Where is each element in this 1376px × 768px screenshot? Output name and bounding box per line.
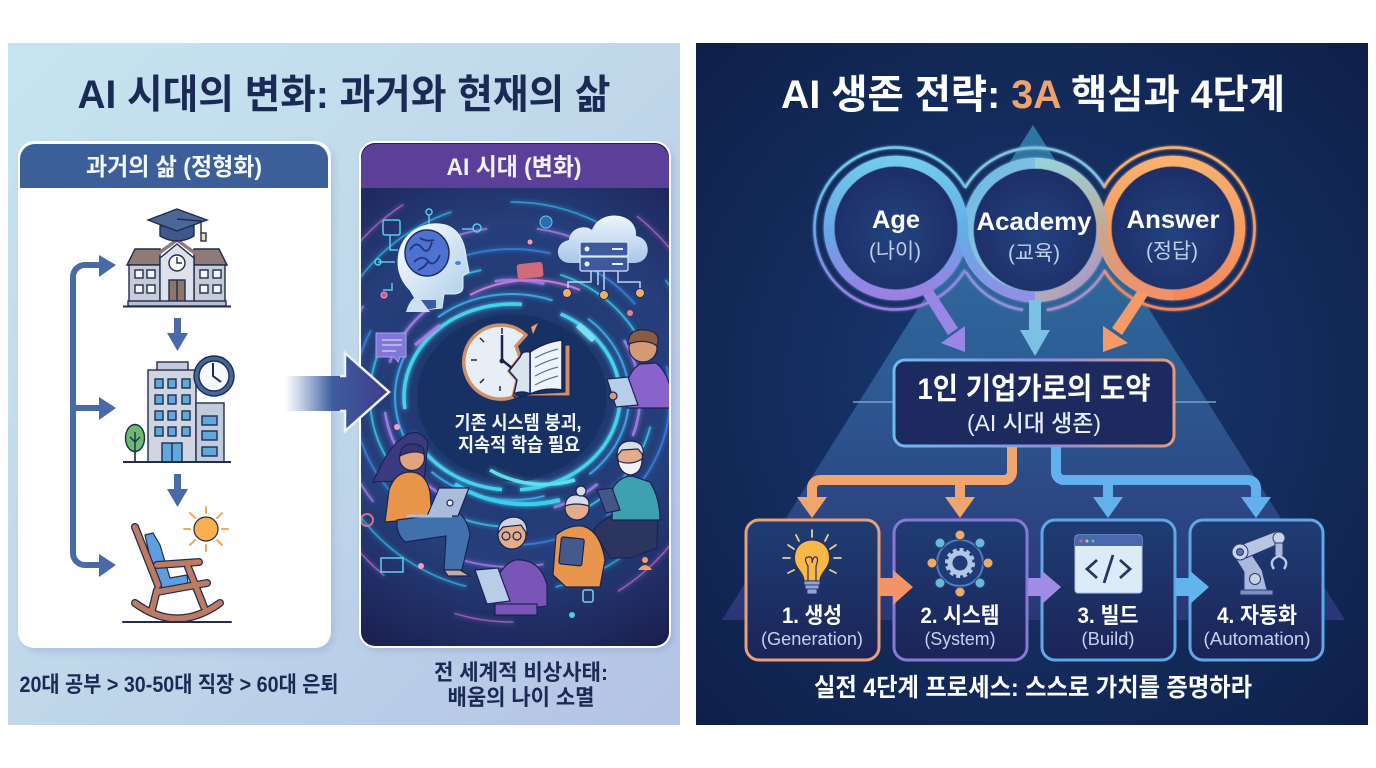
center box: 1인 기업가로의 도약 <box>918 373 1150 406</box>
ring: Answer <box>1106 161 1240 295</box>
person: man with glasses and tablet <box>475 517 547 615</box>
arrow: step 2 to 3 <box>1028 570 1061 605</box>
step 3: build <box>1042 520 1175 660</box>
arrow: step 1 to 2 <box>880 570 913 605</box>
center box: (AI 시대 생존) <box>967 410 1101 436</box>
step 4: automation: 4. 자동화 <box>1217 603 1297 628</box>
icon: cloud server <box>558 216 648 300</box>
ring: Age: Age <box>872 206 920 234</box>
icon: broken clock and book <box>464 323 570 399</box>
icon: gear network <box>927 530 993 597</box>
icon: light bulb <box>783 530 841 594</box>
icon: small floating tags <box>361 216 652 602</box>
S-curve weave <box>896 161 1173 297</box>
arrow: step 3 to 4 <box>1176 570 1209 605</box>
panel: past life <box>18 141 334 652</box>
AI era header: AI 시대 (변화) <box>446 154 582 181</box>
left title: AI 시대의 변화: 과거와 현재의 삶 <box>78 73 610 117</box>
past life header: 과거의 삶 (정형화) <box>86 154 262 181</box>
step 4: automation <box>1190 520 1323 660</box>
pyramid background <box>722 125 1345 620</box>
ring: Academy <box>968 163 1102 297</box>
step 4: automation: (Automation) <box>1204 629 1310 649</box>
arrow: office to retirement <box>167 474 188 507</box>
icon: AI head with brain <box>375 209 481 312</box>
AI illustration background <box>361 143 669 646</box>
step 2: system: (System) <box>924 629 996 649</box>
right caption: global emergency <box>434 660 608 710</box>
icon: school <box>123 209 231 306</box>
ring: Academy: Academy <box>976 208 1092 236</box>
step 1: generation <box>746 520 879 660</box>
step 2: system: 2. 시스템 <box>920 603 1000 628</box>
person: older woman with tablet <box>553 486 605 587</box>
right caption: global emergency: 배움의 나이 소멸 <box>448 685 594 710</box>
person: woman with laptop <box>373 432 470 576</box>
arrow: past to AI era <box>285 352 390 432</box>
right caption: global emergency: 전 세계적 비상사태: <box>434 660 608 685</box>
connector: orange branch <box>797 447 1012 518</box>
ring: Answer: (정답) <box>1146 240 1198 263</box>
left caption: life stages: 20대 공부 > 30-50대 직장 > 60대 은퇴 <box>20 672 338 697</box>
step 2: system <box>894 520 1027 660</box>
connector: blue branch <box>1056 447 1271 518</box>
arrow: Answer to center <box>1103 290 1148 352</box>
person: older man with tablet <box>593 441 660 558</box>
step 3: build: (Build) <box>1082 629 1134 649</box>
icon: code window <box>1075 535 1142 593</box>
arrow: Age to center <box>923 290 965 352</box>
ring: Age <box>829 161 963 295</box>
center message <box>454 412 582 456</box>
icon: robot arm <box>1232 531 1286 595</box>
panel: right background <box>696 43 1368 725</box>
icon: office building <box>123 356 234 462</box>
icon: sun <box>184 507 228 551</box>
center message: 지속적 학습 필요 <box>458 434 580 456</box>
step 1: generation: 1. 생성 <box>782 603 842 628</box>
arrow: school to office <box>167 318 188 351</box>
ring: Age: (나이) <box>869 240 921 263</box>
center message: 기존 시스템 붕괴, <box>454 412 582 434</box>
bottom caption: 실전 4단계 프로세스: 스스로 가치를 증명하라 <box>814 674 1252 702</box>
step 1: generation: (Generation) <box>761 629 863 649</box>
3A interlocking rings <box>814 147 1255 310</box>
loop bracket arrow <box>73 255 116 577</box>
person: woman with tablet <box>607 330 672 408</box>
step 3: build: 3. 빌드 <box>1078 603 1138 628</box>
ring: Answer: Answer <box>1126 206 1220 234</box>
outer thin rings <box>814 147 1255 310</box>
swirling rings <box>361 198 669 626</box>
arrow: Academy to center <box>1020 300 1050 356</box>
center box <box>894 360 1174 446</box>
AI era header <box>361 144 669 188</box>
ring: Academy: (교육) <box>1008 242 1060 265</box>
panel: AI era <box>359 141 676 652</box>
icon: floating chat <box>376 333 406 362</box>
icon: rocking chair <box>123 527 231 622</box>
past life header <box>20 144 328 188</box>
panel: left background <box>8 43 680 725</box>
right title: AI 생존 전략: 3A 핵심과 4단계 <box>781 73 1285 117</box>
